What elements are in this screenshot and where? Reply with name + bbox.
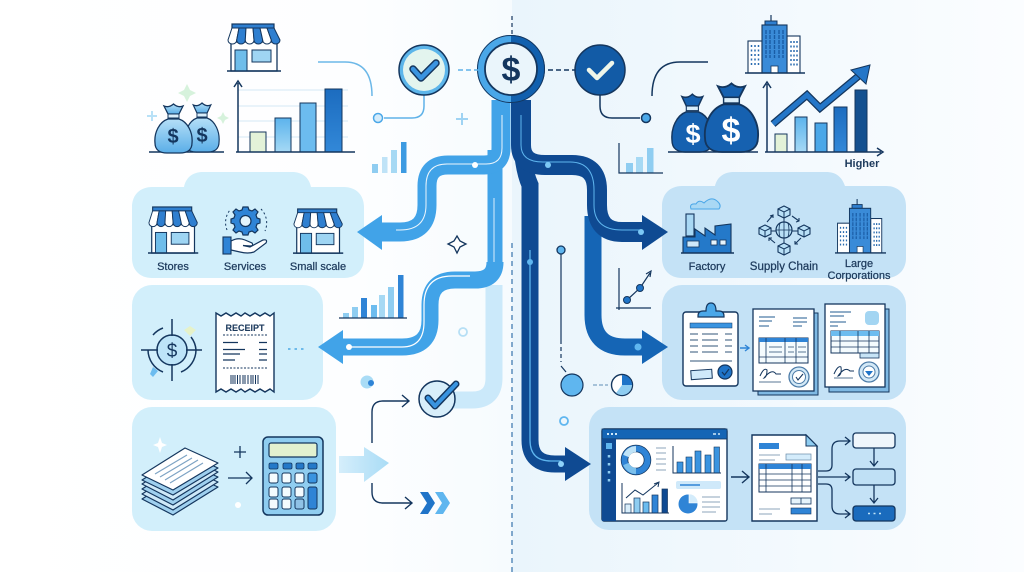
icon: receipt	[216, 313, 274, 392]
dots after receipt	[288, 348, 304, 350]
label: supply chain: Supply Chain	[750, 261, 818, 273]
arrow: paper to calculator	[228, 472, 252, 484]
icon: paper stack	[142, 448, 218, 515]
divider dashes	[511, 243, 513, 572]
icon: large corporation building	[835, 199, 886, 253]
arrow: middle dark path to invoice panel	[593, 216, 668, 364]
arrow: pale lower-left route	[440, 285, 494, 400]
bar chart: above receipt arrow	[339, 275, 407, 318]
label: large corporations: Corporations	[828, 270, 891, 282]
label: receipt: RECEIPT	[225, 323, 265, 333]
chart: workflow boxes	[853, 433, 895, 521]
icon: sparkle	[448, 236, 466, 253]
icon: plus	[234, 446, 246, 458]
icon: chevrons	[420, 492, 450, 514]
icon: contract document	[825, 304, 889, 392]
icon: factory	[681, 199, 734, 253]
arrow: clipboard to invoice	[740, 345, 749, 351]
icon: analytics dashboard window	[602, 429, 727, 521]
arrow: first light path to category panel	[357, 100, 502, 265]
icon: central dollar coin	[477, 35, 545, 103]
icon: invoice document	[753, 309, 818, 395]
icon: store top left	[227, 24, 281, 71]
icon: right check badge and connector	[548, 45, 708, 122]
arrows: report to workflow	[818, 437, 850, 518]
panel: paper and calculator	[132, 407, 336, 531]
icon: report document	[752, 435, 817, 521]
label: stores: Stores	[157, 261, 189, 273]
icon: ring	[459, 328, 467, 336]
icon: dollar target	[141, 319, 202, 381]
icon: money bags right: $	[685, 119, 701, 149]
panel: invoice documents	[662, 285, 906, 400]
bar chart: right growth with trend arrow	[763, 65, 883, 170]
arrow: up branch to check	[372, 395, 409, 443]
panel: receipt	[132, 285, 323, 400]
label: small scale: Small scale	[290, 261, 346, 273]
decorative plus	[456, 113, 468, 125]
icon: white sparkle	[153, 437, 167, 453]
icon: store in panel	[148, 207, 198, 253]
icon: gear over hand	[223, 207, 267, 254]
arrow: long dark path to dashboard panel	[521, 120, 591, 481]
arrow: down branch to chevrons	[372, 483, 412, 509]
label: higher: Higher	[845, 158, 880, 170]
bar chart: small left	[372, 142, 406, 173]
bar chart: small right	[619, 143, 663, 173]
bar chart: left growth	[234, 81, 355, 152]
icon: money bags right	[668, 83, 758, 152]
label: large corporations: Large	[845, 258, 873, 270]
panel: large business categories	[662, 172, 906, 278]
icon: clipboard	[683, 303, 738, 386]
icon: money bags left	[147, 84, 229, 153]
icon: ring right	[560, 417, 568, 425]
panel: small business categories	[132, 172, 364, 278]
icon: money bags right: $	[722, 112, 741, 150]
icon: supply chain network	[759, 206, 810, 255]
icon: overlapping dots	[360, 376, 374, 388]
icon: money bags left: $	[196, 125, 208, 147]
icon: lower check	[419, 381, 456, 417]
icon: left check badge and connector	[318, 45, 480, 122]
arrow: pale block arrow	[339, 447, 389, 482]
icon: money bags left: $	[167, 126, 179, 148]
icon: dollar target: $	[167, 341, 178, 362]
icon: calculator	[263, 437, 323, 515]
arrow: second light path to receipt panel	[318, 262, 495, 364]
icon: connector with node and pie	[557, 246, 632, 396]
label: factory: Factory	[689, 261, 726, 273]
chart: mini line chart	[616, 268, 651, 310]
icon: central dollar coin: $	[502, 51, 521, 89]
panel: dashboard and workflow	[589, 407, 906, 530]
icon: small scale store	[293, 209, 343, 253]
decorative dot	[235, 502, 241, 508]
icon: building top right	[745, 15, 805, 73]
arrow: top dark path to large business panel	[521, 100, 668, 250]
arrow: dashboard to report	[731, 471, 749, 483]
label: services: Services	[224, 261, 267, 273]
